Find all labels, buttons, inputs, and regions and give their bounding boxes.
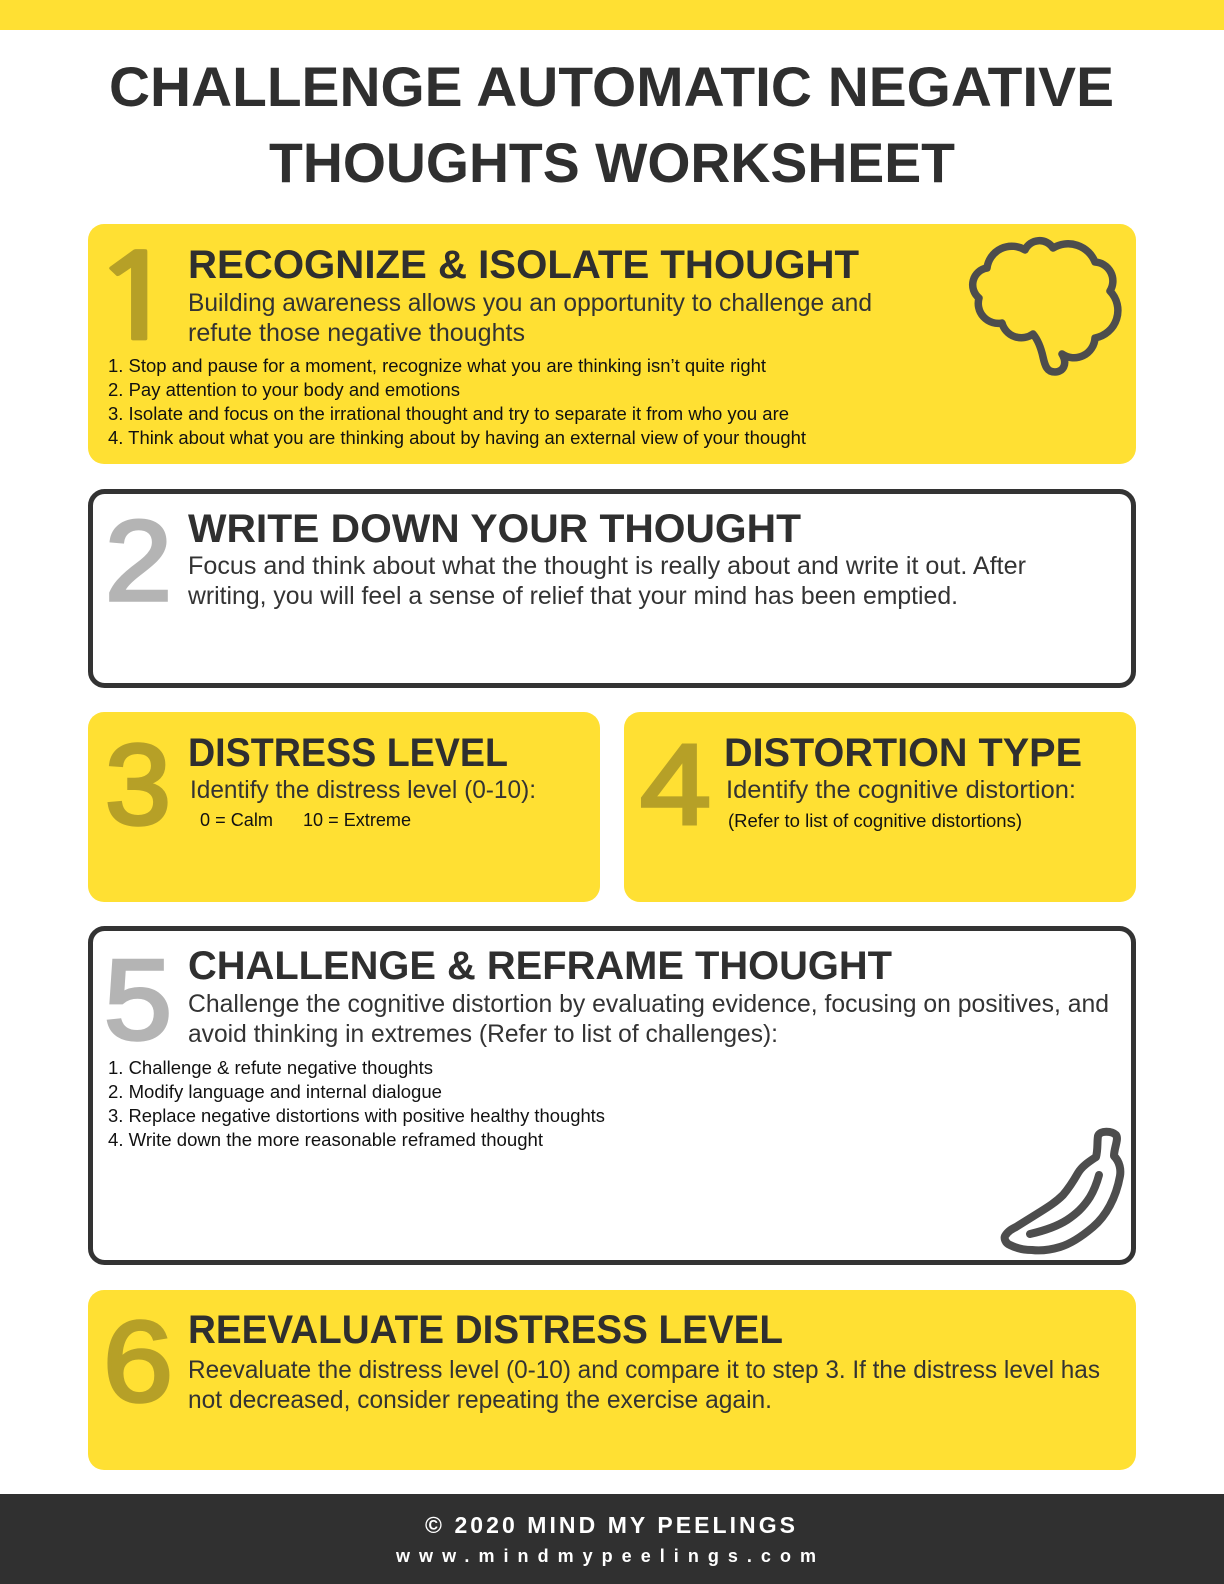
numbered list 1: 2. Pay attention to your body and emotions (108, 380, 460, 400)
numbered list 1 (108, 356, 806, 448)
step number 1: 1 (90, 240, 182, 358)
description 5 (188, 990, 1109, 1048)
numbered list 5: 3. Replace negative distortions with positive healthy thoughts (108, 1106, 605, 1126)
title (109, 55, 1114, 194)
numbered list 5 (108, 1058, 605, 1150)
numbered list 5: 2. Modify language and internal dialogue (108, 1082, 442, 1102)
numbered list 1: 4. Think about what you are thinking about by having an external view of your thought (108, 428, 806, 448)
description 2: writing, you will feel a sense of relief that your mind has been emptied. (187, 582, 958, 610)
heading 6: REEVALUATE DISTRESS LEVEL (188, 1308, 783, 1352)
numbered list 1: 3. Isolate and focus on the irrational thought and try to separate it from who you are (108, 404, 789, 424)
numbered list 5: 4. Write down the more reasonable reframed thought (108, 1130, 543, 1150)
scale note (200, 810, 411, 830)
description 3: Identify the distress level (0-10): (190, 776, 536, 804)
numbered list 5: 1. Challenge & refute negative thoughts (108, 1058, 433, 1078)
copyright line: © 2020 MIND MY PEELINGS (425, 1512, 795, 1538)
description 5: Challenge the cognitive distortion by evaluating evidence, focusing on positives, and (188, 990, 1109, 1018)
heading 3: DISTRESS LEVEL (188, 731, 508, 775)
panel 3: distress level (88, 712, 600, 902)
title: CHALLENGE AUTOMATIC NEGATIVE (109, 55, 1114, 118)
icon: banana (1005, 1132, 1120, 1250)
panel 5: challenge and reframe thought (90, 928, 1134, 1262)
description 6: Reevaluate the distress level (0-10) and compare it to step 3. If the distress level has (188, 1356, 1100, 1384)
title: THOUGHTS WORKSHEET (269, 131, 955, 194)
icon: brain (973, 241, 1118, 372)
panel 1: recognize and isolate thought (88, 224, 1136, 464)
description 1: refute those negative thoughts (188, 319, 525, 347)
heading 5: CHALLENGE & REFRAME THOUGHT (188, 944, 892, 988)
description 2: Focus and think about what the thought is really about and write it out. After (188, 552, 1026, 580)
step number 3: 3 (105, 722, 171, 849)
description 5: avoid thinking in extremes (Refer to list of challenges): (188, 1020, 778, 1048)
scale note: 10 = Extreme (303, 810, 411, 830)
footer (0, 1494, 1224, 1584)
heading 4: DISTORTION TYPE (724, 731, 1082, 775)
reference note: (Refer to list of cognitive distortions) (728, 811, 1022, 831)
step number 4: 4 (640, 722, 711, 849)
panel 4: distortion type (624, 712, 1136, 902)
step number 5: 5 (104, 937, 172, 1064)
top yellow bar (0, 0, 1224, 30)
step number 6: 6 (103, 1299, 173, 1426)
panel 2: write down your thought (90, 492, 1134, 686)
description 1 (188, 289, 872, 347)
panel 6: reevaluate distress level (88, 1290, 1136, 1470)
description 4: Identify the cognitive distortion: (726, 776, 1076, 804)
description 6: not decreased, consider repeating the exercise again. (188, 1386, 772, 1414)
website: www.mindmypeelings.com (395, 1546, 816, 1566)
heading 2: WRITE DOWN YOUR THOUGHT (188, 507, 801, 551)
step number 2: 2 (105, 498, 172, 625)
description 1: Building awareness allows you an opportunity to challenge and (188, 289, 872, 317)
description 6 (188, 1356, 1100, 1414)
scale note: 0 = Calm (200, 810, 273, 830)
description 2 (187, 552, 1026, 610)
numbered list 1: 1. Stop and pause for a moment, recognize what you are thinking isn’t quite right (108, 356, 766, 376)
heading 1: RECOGNIZE & ISOLATE THOUGHT (188, 243, 859, 287)
